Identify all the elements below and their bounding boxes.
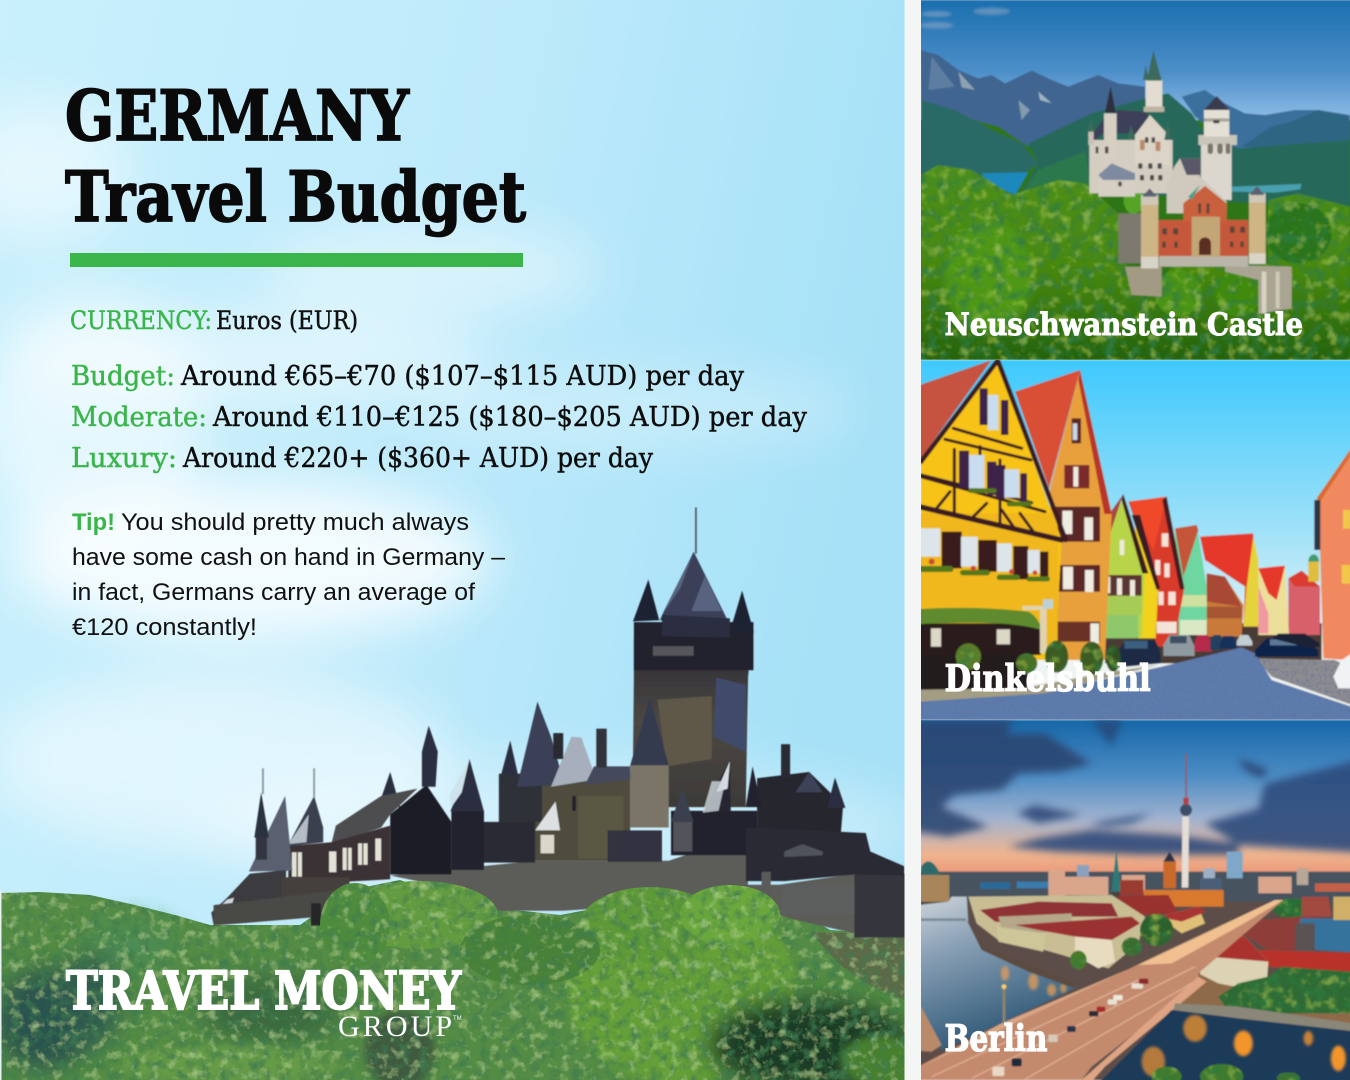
turret on tower xyxy=(630,765,669,827)
forest xyxy=(921,165,1350,360)
centre block xyxy=(499,774,630,861)
TV tower xyxy=(1180,753,1192,888)
right buildings xyxy=(1225,917,1350,950)
foliage in front of castle wall xyxy=(320,881,780,985)
cathedral dome xyxy=(921,861,950,902)
orange house xyxy=(1050,370,1112,660)
title xyxy=(65,76,526,238)
panel: Dinkelsbuhl xyxy=(905,360,1350,720)
red house xyxy=(1128,497,1184,647)
orange lit block xyxy=(1144,890,1224,907)
right wing xyxy=(757,772,843,833)
logo: Travel Money Group: GROUP xyxy=(338,1010,452,1043)
left wing xyxy=(331,789,417,844)
horizon skyline xyxy=(905,872,1350,902)
tip text: have some cash on hand in Germany – xyxy=(72,544,505,571)
photo: Dinkelsbuhl street xyxy=(905,360,1350,720)
currency line xyxy=(70,306,358,335)
left river xyxy=(905,897,1078,1050)
label: Berlin: Berlin xyxy=(945,1018,1047,1060)
photo: Berlin skyline xyxy=(905,720,1350,1080)
tip text: in fact, Germans carry an average of xyxy=(72,579,475,606)
logo: Travel Money Group xyxy=(66,961,462,1043)
budget tiers: Around €65–€70 ($107–$115 AUD) per day xyxy=(180,361,745,392)
label: Dinkelsbuhl: Dinkelsbuhl xyxy=(945,658,1151,700)
budget tiers: Moderate: xyxy=(71,402,207,433)
castle building xyxy=(211,507,907,937)
budget tiers: Budget: xyxy=(71,361,175,392)
budget tiers: Luxury: xyxy=(71,443,177,474)
bushes and lamp xyxy=(956,641,1121,675)
clouds xyxy=(905,720,1350,855)
currency line: CURRENCY: xyxy=(70,306,212,335)
church xyxy=(1112,849,1121,892)
green house xyxy=(1105,497,1145,637)
panel: main castle photo with budget text xyxy=(0,0,920,1080)
budget tiers: Around €220+ ($360+ AUD) per day xyxy=(182,443,654,474)
main road and bridge xyxy=(905,900,1283,1080)
green title rule xyxy=(70,253,523,267)
old town xyxy=(968,895,1145,968)
far houses xyxy=(1288,571,1320,635)
label: Neuschwanstein Castle: Neuschwanstein Castle xyxy=(945,307,1303,343)
logo: Travel Money Group: TM xyxy=(453,1016,462,1022)
right river xyxy=(1095,1010,1350,1080)
yellow narrow house xyxy=(1135,520,1158,638)
road xyxy=(1258,658,1350,705)
title: GERMANY xyxy=(65,76,410,157)
tip text: Tip! xyxy=(72,509,115,536)
cars xyxy=(1118,634,1350,688)
panel: Berlin xyxy=(905,720,1350,1080)
yellow house windows xyxy=(905,388,1050,581)
panel: Neuschwanstein Castle xyxy=(905,0,1350,360)
photo: sky and Cochem castle xyxy=(0,0,920,1080)
tip text xyxy=(72,509,505,641)
mint house xyxy=(1175,525,1207,635)
budget tiers xyxy=(71,361,808,474)
logo: Travel Money Group: TRAVEL MONEY xyxy=(66,961,462,1022)
foliage hillside xyxy=(0,880,920,1080)
yellow half-timbered house xyxy=(921,363,1062,660)
photo: Neuschwanstein xyxy=(905,0,1350,360)
shopfront xyxy=(905,623,1041,655)
tip text: You should pretty much always xyxy=(121,509,469,536)
castle xyxy=(1088,50,1292,314)
edge sliver xyxy=(0,890,2,1080)
tip text: €120 constantly! xyxy=(72,614,257,641)
currency line: Euros (EUR) xyxy=(216,306,358,335)
title: Travel Budget xyxy=(65,157,526,238)
red town hall xyxy=(1163,862,1176,888)
main tower xyxy=(633,639,752,807)
budget tiers: Around €110–€125 ($180–$205 AUD) per day xyxy=(212,402,808,433)
right salmon house xyxy=(1317,450,1350,662)
dark central wing xyxy=(483,822,535,863)
